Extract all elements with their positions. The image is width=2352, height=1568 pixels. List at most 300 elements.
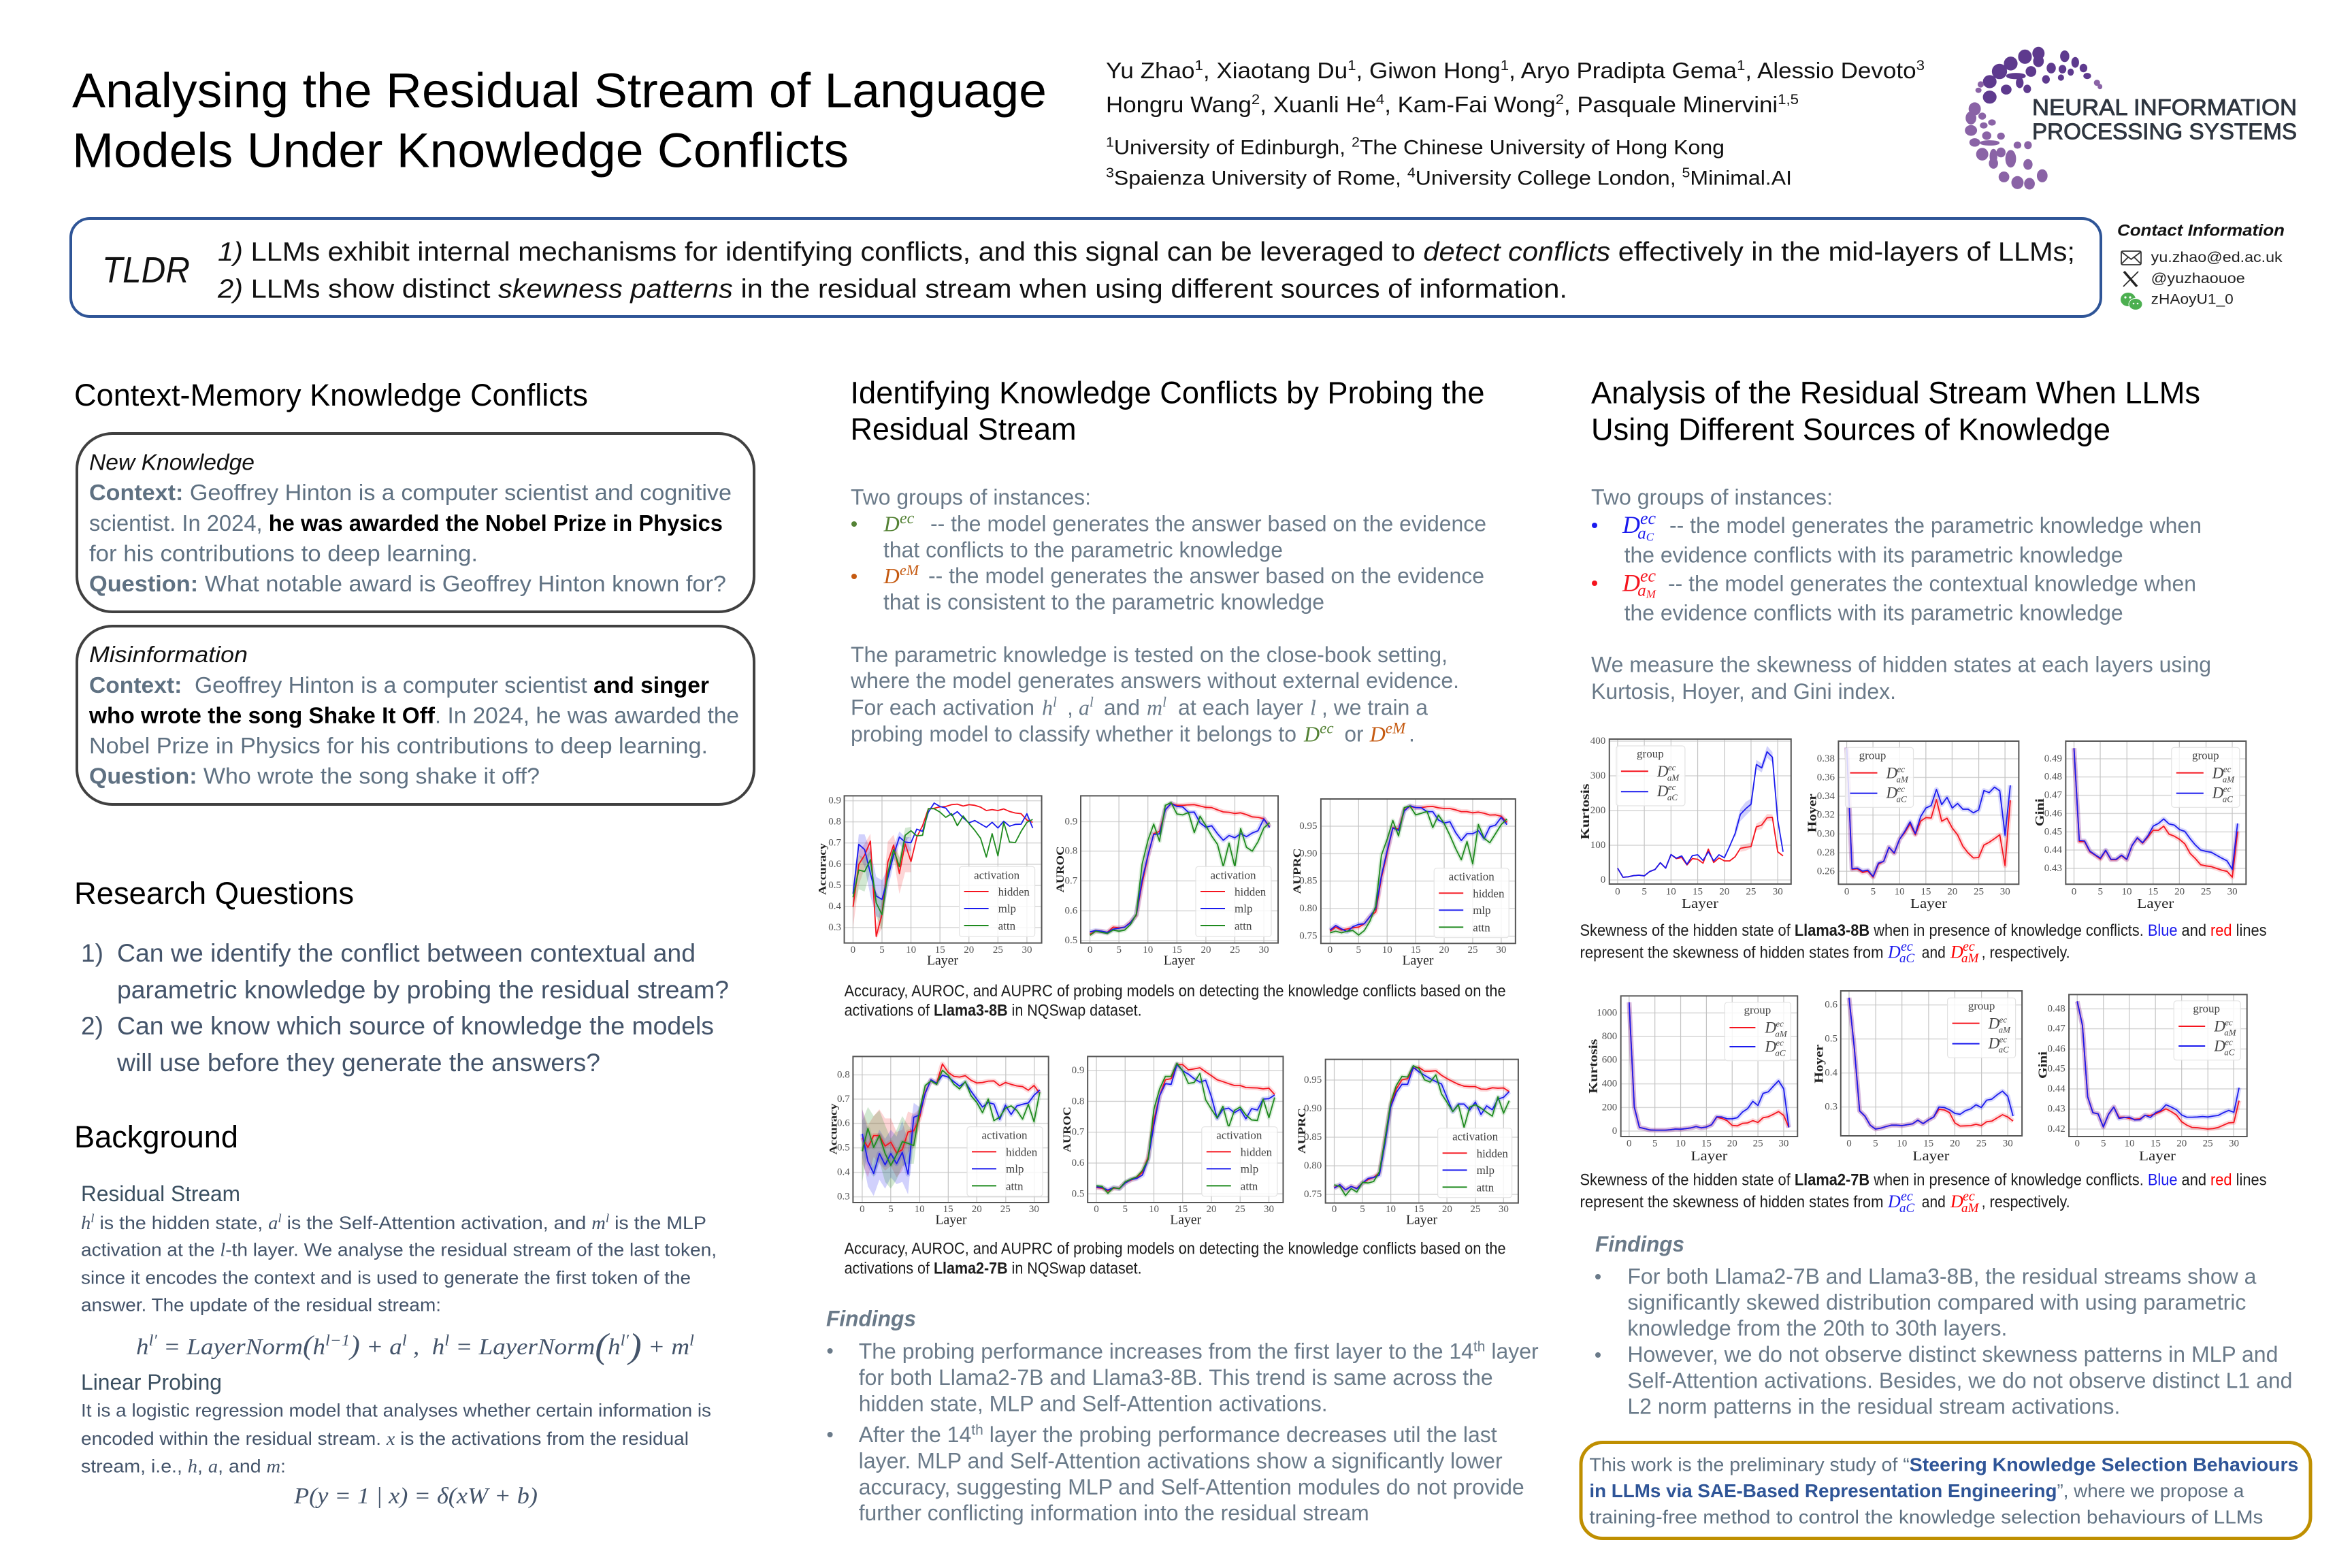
text block: two groups of instances (skewness): M — [1646, 588, 1656, 600]
chart: Kurtosis Llama3-8B: Layer — [1682, 896, 1718, 911]
chart: AUPRC Llama3-8B: 0.80 — [1299, 903, 1318, 914]
chart: Gini Llama3-8B: 5 — [2098, 886, 2103, 897]
heading: Analysis of the Residual Stream: Using Different Sources of Knowledge — [1591, 412, 2110, 446]
text: residual stream description: l — [606, 1211, 609, 1225]
chart: AUROC Llama2-7B: 0.8 — [1072, 1096, 1084, 1107]
chart: Hoyer Llama3-8B: 0.30 — [1817, 828, 1835, 839]
text block: two groups of instances (skewness): C — [1646, 530, 1654, 543]
panel: Misinformation — [77, 626, 754, 804]
chart: Gini Llama2-7B: 0.48 — [2047, 1003, 2065, 1014]
text: residual stream description: is the MLP — [609, 1213, 706, 1233]
chart: Hoyer Llama3-8B: 0.26 — [1817, 866, 1835, 877]
chart: Gini Llama3-8B: Gini — [2033, 798, 2046, 826]
chart: AUROC Llama2-7B: 30 — [1264, 1204, 1274, 1215]
legend: ec — [1776, 1019, 1784, 1029]
chart: Hoyer Llama3-8B: 0.32 — [1817, 810, 1835, 821]
chart: Gini Llama2-7B: 25 — [2203, 1138, 2213, 1149]
formula: residual stream update: l — [444, 1332, 449, 1349]
panel: Findings (skewness): L2 norm patterns in the residual stream activations. — [1627, 1394, 2120, 1419]
legend: ec — [2225, 1017, 2233, 1028]
chart: Accuracy Llama2-7B — [828, 1056, 1049, 1227]
chart: Gini Llama2-7B: Gini — [2036, 1051, 2050, 1079]
chart: AUPRC Llama3-8B: 0.90 — [1299, 848, 1318, 859]
chart: Hoyer Llama2-7B: 0 — [1846, 1138, 1852, 1149]
chart: AUROC Llama3-8B: 30 — [1259, 945, 1269, 956]
caption: Llama2-7B skewness: ec — [1963, 1189, 1975, 1204]
legend: hidden — [1477, 1147, 1508, 1160]
chart: Hoyer Llama2-7B: 0.6 — [1825, 1000, 1838, 1011]
text block: parametric knowledge: eM — [1386, 720, 1407, 736]
authors and affiliations: 2 — [1352, 135, 1360, 150]
panel: Background: Background — [74, 1120, 238, 1154]
panel: Findings (probing): accuracy, suggesting MLP and Self-Attention modules do not provide — [859, 1475, 1524, 1499]
caption: Llama2-7B skewness: represent the skewness of hidden states from — [1580, 1193, 1884, 1211]
legend: activation — [981, 1129, 1028, 1142]
chart: AUROC Llama3-8B: 15 — [1172, 945, 1182, 956]
chart: Hoyer Llama2-7B: 0.5 — [1825, 1034, 1838, 1045]
authors and affiliations: 4 — [1376, 92, 1385, 108]
caption: Llama2-7B skewness: D — [1887, 1192, 1901, 1211]
legend: ec — [2223, 783, 2232, 794]
text block: two groups of instances (skewness) — [1591, 485, 2202, 625]
panel: Findings (probing): layer. MLP and Self-Attention activations show a significantly lower — [859, 1448, 1503, 1473]
heading: Context-Memory Knowledge Conflicts: Context-Memory Knowledge Conflicts — [74, 378, 588, 412]
text block: parametric knowledge: h — [1042, 696, 1053, 720]
chart: AUROC Llama2-7B: 0.6 — [1072, 1158, 1085, 1169]
caption: Llama3-8B skewness: and — [1922, 943, 1946, 962]
legend: activation — [1216, 1129, 1262, 1142]
legend: mlp — [1235, 902, 1252, 915]
heading: Identifying Knowledge Conflicts: Identifying Knowledge Conflicts by Probing the — [851, 376, 1485, 410]
panel: Misinformation: Context: Geoffrey Hinton is a computer scientist and singer — [89, 672, 709, 698]
legend — [1846, 747, 1914, 807]
text: residual stream description: l — [91, 1211, 95, 1225]
text block: two groups of instances (skewness): the evidence conflicts with its parametric knowledge — [1624, 542, 2123, 567]
chart: AUPRC Llama3-8B — [1292, 799, 1516, 968]
authors and affiliations: 1 — [1106, 135, 1114, 150]
authors and affiliations: 3 — [1916, 58, 1925, 74]
chart: Accuracy Llama3-8B — [817, 796, 1042, 968]
subheading: Residual Stream: Residual Stream — [81, 1181, 240, 1206]
contact information: @yuzhaouoe — [2151, 271, 2245, 287]
chart: AUPRC Llama3-8B: 25 — [1467, 945, 1478, 956]
legend: mlp — [998, 902, 1016, 915]
panel: Findings (probing): After the 14 — [859, 1422, 971, 1447]
text block: parametric knowledge — [850, 642, 1459, 746]
text block: two groups of instances (skewness): -- the model generates the parametric knowledge when — [1669, 513, 2202, 538]
chart: Accuracy Llama3-8B: Layer — [927, 953, 958, 968]
panel: Findings (probing): th — [1473, 1339, 1485, 1355]
chart: AUPRC Llama2-7B: 0 — [1332, 1204, 1337, 1215]
panel: TLDR — [71, 218, 2101, 316]
panel: Research Questions: parametric knowledge by probing the residual stream? — [117, 976, 729, 1004]
caption: Llama3-8B skewness: aC — [1899, 951, 1915, 966]
chart: Gini Llama2-7B: 15 — [2151, 1138, 2161, 1149]
caption: Llama3-8B skewness: Skewness of the hidden state of Llama3-8B when in presence of knowledge conflicts. Blue and red lines — [1580, 921, 2266, 940]
legend: aC — [1667, 792, 1678, 802]
authors and affiliations: , Xiaotang Du — [1203, 58, 1348, 83]
legend: ec — [1999, 1014, 2007, 1024]
contact information: yu.zhao@ed.ac.uk — [2151, 250, 2283, 265]
text block: parametric knowledge: D — [1304, 721, 1320, 746]
chart: AUPRC Llama3-8B: 10 — [1382, 945, 1392, 956]
text: residual stream description: h — [81, 1213, 91, 1233]
legend: group — [1859, 749, 1886, 762]
TLDR line 1: 1) LLMs exhibit internal mechanisms for identifying conflicts, and this signal can be leveraged to detect conflicts effectively in the mid-layers of LLMs; — [218, 238, 2075, 267]
legend: aC — [2224, 1047, 2235, 1058]
caption: Llama2-7B skewness — [1580, 1171, 2266, 1215]
legend: mlp — [1006, 1162, 1024, 1175]
legend: D — [2213, 1038, 2225, 1055]
formula: residual stream update: l′ — [621, 1332, 630, 1349]
chart: Kurtosis Llama2-7B: 600 — [1602, 1055, 1617, 1066]
authors and affiliations: , Giwon Hong — [1356, 58, 1501, 83]
authors and affiliations: 4 — [1407, 166, 1416, 181]
title — [72, 64, 1047, 178]
chart: Accuracy Llama2-7B: 0.8 — [837, 1069, 850, 1080]
chart: AUROC Llama2-7B: 10 — [1149, 1204, 1159, 1215]
icon: X — [2123, 272, 2138, 287]
text: residual stream description: activation at the l-th layer. We analyse the residual stream of the last token, — [81, 1240, 717, 1260]
legend: D — [1988, 1015, 2000, 1032]
chart: AUROC Llama2-7B — [1062, 1056, 1283, 1227]
text block: skewness measures — [1591, 653, 2211, 704]
authors and affiliations: Yu Zhao — [1106, 58, 1190, 83]
text: residual stream description: since it encodes the context and is used to generate the first token of the — [81, 1267, 691, 1288]
chart: AUROC Llama3-8B: 0.5 — [1065, 935, 1077, 946]
panel: New Knowledge: Context: Geoffrey Hinton is a computer scientist and cognitive — [89, 480, 732, 505]
legend — [1196, 866, 1271, 936]
text block: parametric knowledge: l — [1053, 694, 1057, 710]
legend: D — [1764, 1019, 1776, 1036]
chart: Kurtosis Llama2-7B: 25 — [1753, 1138, 1763, 1149]
chart: Kurtosis Llama2-7B: 200 — [1602, 1102, 1617, 1113]
authors and affiliations: 1 — [1737, 58, 1745, 74]
text block: parametric knowledge: l — [1090, 694, 1094, 710]
legend: D — [2213, 1018, 2225, 1035]
chart: Hoyer Llama3-8B: 5 — [1871, 886, 1876, 897]
chart: Kurtosis Llama3-8B: 400 — [1590, 736, 1605, 747]
chart: Accuracy Llama3-8B: 30 — [1022, 945, 1032, 956]
chart: AUPRC Llama2-7B: 30 — [1499, 1204, 1509, 1215]
chart: Hoyer Llama2-7B: 20 — [1950, 1138, 1960, 1149]
legend: D — [2212, 784, 2224, 801]
chart: AUPRC Llama2-7B: 10 — [1386, 1204, 1396, 1215]
chart: Hoyer Llama3-8B: Hoyer — [1805, 794, 1818, 832]
chart: Gini Llama2-7B: 0.44 — [2047, 1083, 2065, 1094]
legend: aC — [1775, 1048, 1786, 1058]
caption: Llama3-8B skewness: ec — [1963, 939, 1975, 954]
chart: Hoyer Llama2-7B: 5 — [1873, 1138, 1878, 1149]
chart: Kurtosis Llama2-7B: 20 — [1727, 1138, 1737, 1149]
chart: Kurtosis Llama3-8B: 10 — [1666, 886, 1676, 897]
text block: two groups of instances (probing): that is consistent to the parametric knowledge — [883, 589, 1324, 614]
legend: mlp — [1241, 1162, 1258, 1175]
chart: Accuracy Llama3-8B: 25 — [993, 945, 1003, 956]
text block: two groups of instances (skewness): ec — [1640, 566, 1656, 585]
chart: Gini Llama2-7B: 5 — [2101, 1138, 2106, 1149]
legend: aM — [1775, 1029, 1788, 1039]
chart: Kurtosis Llama2-7B: 0 — [1612, 1126, 1617, 1137]
panel: Findings (skewness): Findings — [1595, 1232, 1684, 1256]
chart: AUROC Llama2-7B: 0.7 — [1072, 1127, 1085, 1138]
legend — [1725, 1002, 1791, 1061]
caption: Llama3-8B skewness — [1580, 921, 2266, 966]
TLDR label: TLDR — [102, 250, 190, 291]
panel: Research Questions: Can we identify the conflict between contextual and — [117, 939, 696, 967]
formula: residual stream update: l−1 — [325, 1332, 350, 1349]
caption: Llama3-8B skewness: aM — [1961, 951, 1979, 966]
authors and affiliations: , Alessio Devoto — [1745, 58, 1916, 83]
chart: Accuracy Llama3-8B: 5 — [879, 945, 885, 956]
chart: Kurtosis Llama3-8B: 0 — [1601, 875, 1605, 885]
panel: Findings (probing): further conflicting information into the residual stream — [859, 1501, 1369, 1525]
panel: Research Questions: 1) — [81, 939, 103, 967]
legend: D — [2212, 764, 2224, 781]
text block: two groups of instances (probing): Two groups of instances: — [851, 485, 1091, 510]
legend: ec — [2223, 764, 2232, 774]
text block: two groups of instances (probing): -- the model generates the answer based on the evidence — [930, 512, 1486, 536]
icon: email — [2121, 251, 2141, 265]
logo: NeurIPS: PROCESSING SYSTEMS — [2032, 118, 2297, 144]
text: linear probing description: encoded within the residual stream. x is the activations from the residual — [81, 1428, 689, 1449]
panel: New Knowledge — [77, 434, 754, 612]
legend: group — [1744, 1004, 1771, 1017]
chart: Hoyer Llama2-7B: 0.3 — [1825, 1102, 1838, 1113]
legend: hidden — [1006, 1145, 1038, 1158]
chart: AUPRC Llama2-7B — [1296, 1060, 1518, 1227]
heading: Identifying Knowledge Conflicts — [851, 376, 1485, 446]
legend: aM — [1896, 774, 1909, 784]
formula: residual stream update: l — [689, 1332, 694, 1349]
chart: Gini Llama2-7B — [2036, 994, 2247, 1164]
chart: Hoyer Llama3-8B: 10 — [1895, 886, 1905, 897]
chart: Hoyer Llama2-7B: 15 — [1923, 1138, 1933, 1149]
text: residual stream description: is the Self-Attention activation, and — [282, 1213, 591, 1233]
text block: parametric knowledge: , we train a — [1322, 696, 1428, 720]
chart: Gini Llama2-7B: 0.46 — [2047, 1043, 2065, 1054]
chart: Accuracy Llama3-8B: 0.6 — [828, 859, 841, 870]
text block: two groups of instances (skewness): the evidence conflicts with its parametric knowledge — [1624, 600, 2123, 625]
text: linear probing description: It is a logistic regression model that analyses whether certain information is — [81, 1401, 711, 1421]
authors and affiliations — [1106, 58, 1925, 190]
caption: Llama2-7B skewness: D — [1950, 1192, 1963, 1211]
chart: AUROC Llama2-7B: 25 — [1235, 1204, 1245, 1215]
chart: AUPRC Llama3-8B: 0.95 — [1299, 821, 1318, 832]
chart: AUPRC Llama2-7B: 0.80 — [1304, 1160, 1322, 1171]
logo: NeurIPS: NEURAL INFORMATION — [2032, 95, 2297, 120]
formula: linear probing: P(y = 1 | x) = δ(xW + b) — [293, 1484, 538, 1509]
text block: two groups of instances (probing): D — [883, 512, 900, 536]
chart: Accuracy Llama3-8B: 0.7 — [828, 838, 841, 849]
authors and affiliations: Spaienza University of Rome, — [1114, 167, 1407, 190]
chart: Kurtosis Llama3-8B: 300 — [1590, 770, 1605, 781]
chart: Kurtosis Llama3-8B: 25 — [1746, 886, 1756, 897]
authors and affiliations: , Kam-Fai Wong — [1384, 92, 1556, 117]
authors and affiliations: 1 — [1348, 58, 1356, 74]
formula: residual stream update: , h — [407, 1335, 444, 1360]
authors and affiliations: The Chinese University of Hong Kong — [1360, 137, 1725, 159]
panel: Misinformation: Misinformation — [89, 642, 248, 667]
panel: Research Questions: Research Questions — [74, 876, 354, 911]
legend: mlp — [1477, 1164, 1494, 1177]
chart: Kurtosis Llama2-7B: 30 — [1778, 1138, 1788, 1149]
chart: Hoyer Llama3-8B: 0 — [1844, 886, 1849, 897]
authors and affiliations: Hongru Wang — [1106, 92, 1243, 117]
caption: Llama2-7B skewness: ec — [1901, 1189, 1913, 1204]
chart: Kurtosis Llama3-8B — [1578, 736, 1791, 911]
text block: parametric knowledge: where the model generates answers without external evidence. — [850, 668, 1459, 693]
chart: Accuracy Llama2-7B: 0.4 — [837, 1167, 850, 1178]
chart: AUROC Llama3-8B: Layer — [1164, 953, 1195, 968]
chart: Gini Llama3-8B: 0.43 — [2044, 863, 2062, 874]
chart: Hoyer Llama3-8B: 0.38 — [1817, 753, 1835, 764]
authors and affiliations: University College London, — [1416, 167, 1682, 190]
chart: Kurtosis Llama2-7B: 400 — [1602, 1079, 1617, 1090]
contact information — [2117, 222, 2285, 310]
chart: Accuracy Llama3-8B: 15 — [935, 945, 945, 956]
caption: Llama2-7B skewness: and — [1922, 1193, 1946, 1211]
legend: group — [2193, 1002, 2220, 1015]
text block: parametric knowledge: m — [1147, 696, 1162, 720]
chart: Gini Llama3-8B: 0.49 — [2044, 753, 2062, 764]
text block: two groups of instances (skewness): a — [1637, 524, 1646, 542]
chart: Gini Llama3-8B: 15 — [2148, 886, 2158, 897]
callout: preliminary study: This work is the preliminary study of “ Steering Knowledge Selection Behaviours — [1589, 1454, 2298, 1475]
chart: AUPRC Llama2-7B: Layer — [1406, 1212, 1437, 1227]
chart: AUPRC Llama3-8B: 30 — [1496, 945, 1506, 956]
callout: preliminary study: training-free method to control the knowledge selection behaviours of LLMs — [1589, 1506, 2263, 1527]
chart: Accuracy Llama2-7B: Layer — [935, 1212, 967, 1227]
contact information: Contact Information — [2117, 222, 2285, 240]
legend: aM — [2224, 1028, 2237, 1038]
chart: Gini Llama3-8B: 0.46 — [2044, 808, 2062, 819]
legend: ec — [1776, 1038, 1784, 1048]
authors and affiliations: , Pasquale Minervini — [1564, 92, 1778, 117]
caption: Llama3-8B skewness: D — [1950, 942, 1963, 962]
text block: two groups of instances (skewness): -- the model generates the contextual knowledge when — [1668, 572, 2196, 596]
legend: D — [1988, 1034, 2000, 1051]
text block: parametric knowledge: l — [1310, 696, 1316, 720]
legend: attn — [1235, 919, 1252, 932]
legend: group — [1637, 747, 1664, 760]
text block: parametric knowledge: at each layer — [1178, 696, 1303, 720]
heading: Identifying Knowledge Conflicts: Residual Stream — [851, 412, 1077, 446]
chart: Accuracy Llama2-7B: 20 — [972, 1204, 982, 1215]
caption: Llama2-7B skewness: aM — [1961, 1201, 1979, 1215]
chart: Kurtosis Llama3-8B: 5 — [1642, 886, 1647, 897]
chart: AUPRC Llama3-8B: 0 — [1328, 945, 1333, 956]
chart: Accuracy Llama2-7B: 0 — [860, 1204, 865, 1215]
legend: aC — [1896, 794, 1907, 804]
chart: Gini Llama3-8B: 25 — [2201, 886, 2211, 897]
chart: Gini Llama3-8B: Layer — [2137, 896, 2174, 911]
formula: residual stream update: = LayerNorm — [157, 1335, 303, 1360]
legend: ec — [2225, 1037, 2233, 1047]
panel: Research Questions: Can we know which source of knowledge the models — [117, 1012, 714, 1040]
legend: group — [1968, 999, 1995, 1012]
chart: Gini Llama3-8B: 10 — [2122, 886, 2132, 897]
text block: parametric knowledge: . — [1409, 721, 1415, 746]
chart: AUPRC Llama2-7B: 0.95 — [1304, 1075, 1322, 1085]
TLDR line 2: 2) LLMs show distinct skewness patterns in the residual stream when using different sources of information. — [217, 275, 1567, 304]
caption: Llama3-8B probing — [845, 982, 1506, 1020]
chart: AUPRC Llama3-8B: 0.85 — [1299, 876, 1318, 887]
chart: AUPRC Llama3-8B: 0.75 — [1299, 931, 1318, 942]
text block: parametric knowledge: ec — [1320, 720, 1334, 736]
chart: AUROC Llama2-7B: 0.9 — [1072, 1065, 1084, 1076]
text block: parametric knowledge: l — [1162, 694, 1166, 710]
text block: skewness measures: We measure the skewness of hidden states at each layers using — [1591, 653, 2211, 677]
legend: mlp — [1473, 904, 1491, 917]
legend: D — [1885, 784, 1897, 801]
legend: hidden — [1473, 887, 1505, 900]
heading: Analysis of the Residual Stream — [1591, 376, 2200, 446]
chart: Hoyer Llama2-7B: 10 — [1897, 1138, 1907, 1149]
chart: Kurtosis Llama3-8B: 0 — [1615, 886, 1620, 897]
heading: Analysis of the Residual Stream: Analysis of the Residual Stream When LLMs — [1591, 376, 2200, 410]
chart: Hoyer Llama2-7B: Layer — [1912, 1149, 1950, 1164]
chart: AUPRC Llama2-7B: 25 — [1470, 1204, 1480, 1215]
caption: Llama3-8B skewness: D — [1887, 942, 1901, 962]
chart: Accuracy Llama2-7B: 5 — [888, 1204, 894, 1215]
chart: Accuracy Llama3-8B: 0.3 — [828, 922, 841, 933]
chart: Gini Llama3-8B: 20 — [2174, 886, 2185, 897]
caption: Llama3-8B probing: activations of Llama3-8B in NQSwap dataset. — [845, 1002, 1142, 1020]
formula: residual stream update: h — [136, 1335, 148, 1360]
chart: Kurtosis Llama3-8B: 200 — [1590, 805, 1605, 816]
chart: Kurtosis Llama3-8B: 100 — [1590, 840, 1605, 851]
chart: Hoyer Llama3-8B — [1805, 741, 2019, 911]
text block: parametric knowledge: , — [1067, 696, 1073, 720]
chart: Accuracy Llama3-8B: 0.5 — [828, 880, 841, 891]
legend — [960, 866, 1035, 936]
caption: Llama3-8B skewness: represent the skewness of hidden states from — [1580, 943, 1884, 962]
panel: Findings (probing): layer — [1485, 1339, 1539, 1364]
chart: Gini Llama2-7B: 0.45 — [2047, 1064, 2065, 1075]
chart: Kurtosis Llama2-7B: 800 — [1602, 1031, 1617, 1042]
chart: Gini Llama2-7B: 0 — [2075, 1138, 2080, 1149]
legend: D — [1656, 783, 1669, 800]
panel: Findings (probing): hidden state, MLP and Self-Attention activations. — [859, 1391, 1328, 1416]
chart: AUROC Llama3-8B: 0.7 — [1065, 875, 1078, 886]
chart: Accuracy Llama2-7B: 0.6 — [837, 1118, 850, 1129]
chart: AUROC Llama2-7B: 0.5 — [1072, 1188, 1084, 1199]
legend: hidden — [1235, 885, 1267, 898]
panel: Findings (probing) — [826, 1306, 1539, 1525]
text: linear probing description: stream, i.e., h, a, and m: — [81, 1456, 286, 1477]
chart: Hoyer Llama2-7B: 25 — [1976, 1138, 1987, 1149]
chart: Kurtosis Llama2-7B: 15 — [1701, 1138, 1712, 1149]
callout: preliminary study: in LLMs via SAE-Based Representation Engineering”, where we propose a — [1589, 1480, 2244, 1501]
caption: Llama2-7B probing: activations of Llama2-7B in NQSwap dataset. — [845, 1260, 1142, 1278]
chart: Kurtosis Llama3-8B: 30 — [1773, 886, 1783, 897]
chart: Accuracy Llama3-8B: 0.9 — [828, 796, 841, 806]
chart: AUROC Llama3-8B: 0 — [1088, 945, 1092, 956]
panel: New Knowledge: scientist. In 2024, he was awarded the Nobel Prize in Physics — [89, 510, 723, 536]
chart: Hoyer Llama3-8B: 0.36 — [1817, 772, 1835, 783]
formula: residual stream update: l′ — [148, 1332, 158, 1349]
chart: AUROC Llama2-7B: 5 — [1123, 1204, 1128, 1215]
formula: residual stream update: ( — [595, 1327, 610, 1366]
chart: Kurtosis Llama3-8B: 20 — [1719, 886, 1729, 897]
chart: AUROC Llama2-7B: Layer — [1170, 1212, 1202, 1227]
authors and affiliations: Minimal.AI — [1690, 167, 1792, 190]
chart: AUPRC Llama3-8B: 5 — [1356, 945, 1361, 956]
text block: two groups of instances (skewness): D — [1622, 569, 1640, 596]
legend — [967, 1127, 1043, 1196]
text block: two groups of instances (skewness): Two groups of instances: — [1591, 485, 1833, 509]
